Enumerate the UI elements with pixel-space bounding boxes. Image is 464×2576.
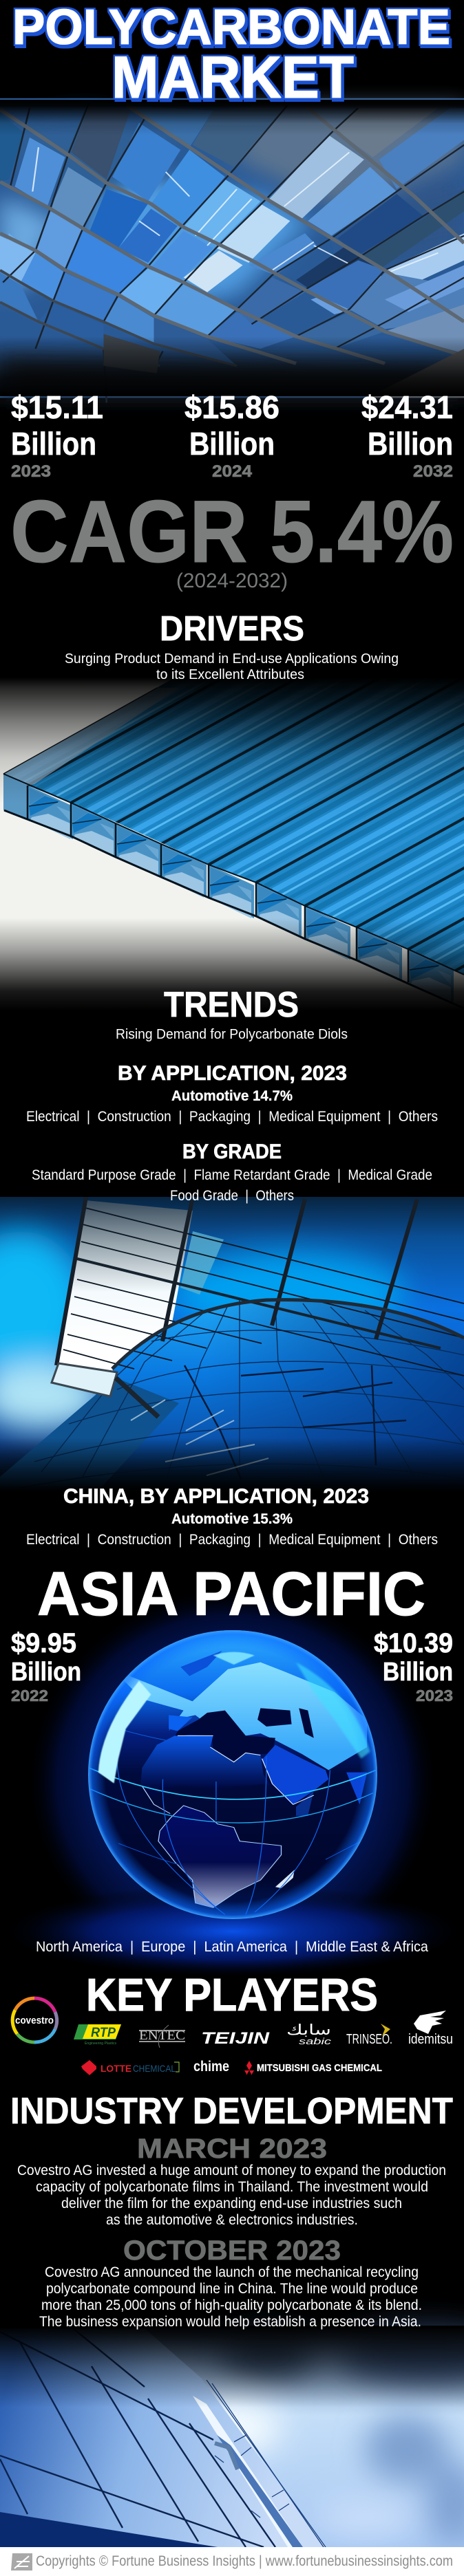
key players heading: KEY PLAYERS — [86, 1969, 378, 2021]
stat: 2023 market size: 2023 — [11, 462, 51, 481]
stat: 2032 market size — [361, 389, 453, 481]
China automotive share: Automotive 15.3% — [171, 1511, 293, 1527]
automotive share: Automotive 14.7% — [171, 1088, 293, 1104]
by grade heading: BY GRADE — [182, 1140, 282, 1163]
stat: Asia Pacific 2022: 2022 — [11, 1687, 48, 1704]
image: building against sky — [0, 2325, 464, 2547]
grade segments: Food Grade | Others — [170, 1188, 294, 1204]
logo: RTP: Engineering Plastics — [85, 2042, 116, 2046]
logo: Trinseo — [346, 2024, 392, 2047]
meridians — [117, 1756, 330, 1914]
logo: RTP: RTP — [91, 2026, 116, 2040]
Africa — [140, 1735, 293, 1804]
stat: 2023 market size: $15.11 — [11, 389, 103, 425]
upper landmass — [112, 1663, 367, 1770]
footer logo — [11, 2553, 32, 2570]
glazing cross bars — [3, 103, 464, 402]
stat: 2032 market size: $24.31 — [361, 389, 453, 425]
window frame panes — [55, 1200, 193, 1379]
bottom layer tip — [4, 784, 28, 817]
date: March 2023: MARCH 2023 — [137, 2134, 327, 2164]
image: glowing globe — [26, 1597, 439, 1973]
logo: Covestro: covestro — [15, 2015, 54, 2026]
October 2023 text: more than 25,000 tons of high-quality polycarbonate & its blend. — [41, 2297, 422, 2313]
October 2023 text: polycarbonate compound line in China. The line would produce — [46, 2281, 418, 2297]
building base — [0, 2512, 218, 2547]
frame horizontals — [63, 1207, 464, 1376]
logo: Idemitsu: idemitsu — [408, 2032, 453, 2047]
main structural beams — [0, 106, 464, 363]
stat: 2024 market size: 2024 — [212, 462, 253, 481]
building facade — [0, 2328, 326, 2547]
CAGR period: (2024-2032) — [176, 570, 288, 592]
dome meridians — [14, 1300, 464, 1493]
October 2023 text — [39, 2264, 422, 2330]
stat: Asia Pacific 2023: Billion — [383, 1658, 453, 1687]
trends text: Rising Demand for Polycarbonate Diols — [116, 1027, 348, 1042]
title: MARKET — [112, 45, 354, 111]
Mediterranean — [175, 1711, 275, 1761]
by application heading: BY APPLICATION, 2023 — [118, 1062, 347, 1085]
logo: Mitsubishi Gas Chemical: MITSUBISHI GAS CHEMICAL — [257, 2062, 382, 2074]
stat: 2024 market size: Billion — [189, 426, 275, 462]
stat: 2024 market size: $15.86 — [184, 389, 280, 425]
drivers heading: DRIVERS — [160, 609, 304, 648]
dark reflections — [184, 1365, 406, 1479]
logo: Sabic: sabic — [299, 2036, 332, 2046]
March 2023 text: deliver the film for the expanding end-use industries such — [61, 2196, 402, 2211]
stat: 2023 market size: Billion — [11, 426, 96, 462]
title — [12, 0, 450, 111]
drivers text: to its Excellent Attributes — [156, 667, 304, 682]
logo: Teijin: TEIJIN — [201, 2029, 270, 2048]
frame verticals — [56, 1197, 417, 1365]
March 2023 text — [17, 2163, 446, 2228]
streak lights — [32, 147, 438, 272]
grade segments — [32, 1167, 432, 1204]
stat: 2024 market size — [184, 389, 280, 481]
Asia Pacific heading: ASIA PACIFIC — [37, 1560, 425, 1629]
logo: Sabic: سابك — [286, 2022, 331, 2038]
logo: Lotte Chemical: LOTTE — [101, 2063, 131, 2074]
logo: Lotte Chemical — [81, 2060, 179, 2075]
trends heading: TRENDS — [164, 985, 299, 1025]
logo: Mitsubishi Gas Chemical — [244, 2061, 382, 2075]
March 2023 text: capacity of polycarbonate films in Thailand. The investment would — [36, 2179, 428, 2195]
stat: Asia Pacific 2022 — [11, 1628, 81, 1704]
logo: Entec — [139, 2025, 185, 2048]
China heading: CHINA, BY APPLICATION, 2023 — [63, 1485, 369, 1508]
stat: Asia Pacific 2023: 2023 — [416, 1687, 453, 1704]
drivers text: Surging Product Demand in End-use Applications Owing — [65, 651, 399, 667]
island — [275, 1870, 295, 1888]
stat: 2032 market size: 2032 — [413, 462, 453, 481]
October 2023 text: Covestro AG announced the launch of the mechanical recycling — [45, 2264, 419, 2280]
March 2023 text: as the automotive & electronics industries. — [106, 2212, 358, 2228]
stat: 2023 market size — [11, 389, 103, 481]
stat: Asia Pacific 2022: Billion — [11, 1658, 81, 1687]
stat: 2032 market size: Billion — [368, 426, 453, 462]
South America — [158, 1806, 281, 1907]
hero image: glass ceiling — [0, 98, 464, 402]
glass fin and ladder — [193, 2396, 303, 2547]
footer — [0, 2547, 464, 2576]
logo: Entec: ENTEC — [139, 2028, 185, 2043]
logo: Sabic — [286, 2022, 332, 2046]
logo: Trinseo: TRINSEO. — [346, 2032, 392, 2047]
drivers text — [65, 651, 399, 682]
date: October 2023: OCTOBER 2023 — [123, 2236, 341, 2266]
title: POLYCARBONATE — [12, 0, 450, 55]
Arabia — [262, 1745, 328, 1804]
logo: Covestro — [12, 1998, 57, 2042]
stat: Asia Pacific 2023: $10.39 — [374, 1628, 453, 1658]
logo: Idemitsu — [408, 2011, 453, 2047]
dome building — [43, 1301, 464, 1476]
other regions: North America | Europe | Latin America | Middle East & Africa — [36, 1939, 428, 1955]
latitude rings — [89, 1768, 376, 1799]
logo: Chime: chime — [193, 2059, 229, 2075]
image: polycarbonate multiwall sheet — [0, 680, 464, 1004]
stat: Asia Pacific 2023 — [374, 1628, 453, 1704]
image: glass building — [0, 1197, 464, 1493]
stat: Asia Pacific 2022: $9.95 — [11, 1628, 76, 1658]
logo: Lotte Chemical: CHEMICAL — [133, 2063, 176, 2074]
October 2023 text: The business expansion would help establish a presence in Asia. — [39, 2314, 421, 2330]
logo: RTP — [74, 2024, 121, 2046]
